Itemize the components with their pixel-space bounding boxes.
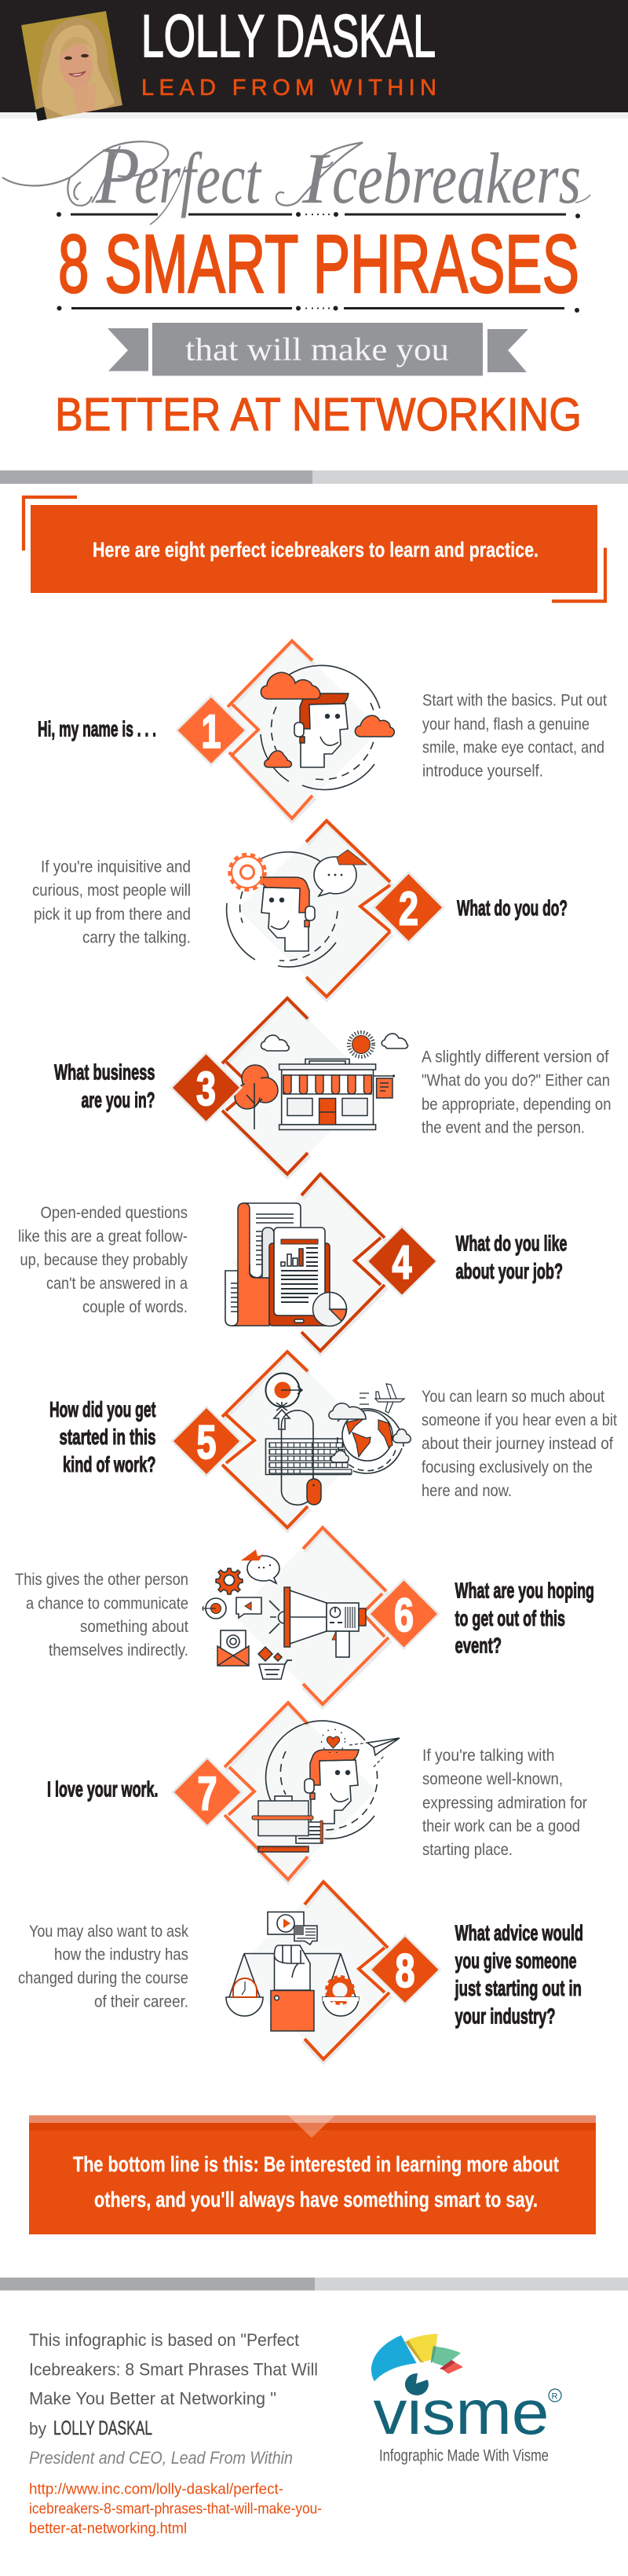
- body 3: the event and the person.: [422, 1118, 585, 1137]
- divider bar: [0, 470, 628, 484]
- title: script line: P: [95, 130, 140, 221]
- ornament rule top: [57, 212, 580, 218]
- diamond frame 6: [234, 1528, 411, 1707]
- tagline: LEAD FROM WITHIN: [141, 75, 436, 101]
- heading 6: event?: [455, 1634, 502, 1657]
- number badge 8: [369, 1934, 441, 2006]
- heading 3: What business: [54, 1060, 155, 1085]
- body 7: If you're talking with: [422, 1747, 554, 1765]
- body 6: This gives the other person: [15, 1571, 188, 1589]
- body 5: focusing exclusively on the: [422, 1458, 593, 1476]
- body 4: can't be answered in a: [46, 1275, 188, 1293]
- source credits: LOLLY DASKAL: [53, 2417, 152, 2439]
- body 5: here and now.: [422, 1482, 512, 1500]
- item 7: [47, 1703, 587, 1883]
- source link: icebreakers-8-smart-phrases-that-will-make-you-: [29, 2501, 322, 2518]
- icon: person with briefcase and paper plane: [252, 1721, 400, 1852]
- heading 4: [455, 1231, 567, 1283]
- body 7: starting place.: [422, 1841, 513, 1859]
- body 2: curious, most people will: [32, 881, 191, 900]
- intro callout: [24, 497, 605, 602]
- diamond frame 8: [235, 1882, 412, 2062]
- source link: better-at-networking.html: [29, 2520, 187, 2537]
- heading 2: What do you do?: [457, 896, 568, 920]
- icon: megaphone with social symbols: [203, 1550, 366, 1679]
- icon: person with clouds: [261, 665, 394, 789]
- body 8: how the industry has: [54, 1946, 188, 1964]
- divider bar: [0, 2278, 628, 2290]
- diamond frame 1: [203, 641, 381, 821]
- icon: keyboard, target and globe: [265, 1373, 411, 1505]
- diamond frame 5: [199, 1352, 376, 1531]
- heading 4: What do you like: [455, 1231, 567, 1255]
- item 1: [38, 641, 607, 821]
- body 8: You may also want to ask: [29, 1923, 188, 1941]
- visme logo: visme: [374, 2377, 550, 2447]
- body 4: Open-ended questions: [41, 1204, 188, 1222]
- source credits: [29, 2330, 318, 2468]
- number badge 4: 4: [392, 1236, 412, 1289]
- heading 1: Hi, my name is . . .: [38, 716, 156, 741]
- intro callout: Here are eight perfect icebreakers to learn and practice.: [93, 538, 539, 562]
- author photo: [21, 11, 122, 126]
- body 4: like this are a great follow-: [18, 1228, 188, 1246]
- diamond frame 4: [232, 1174, 409, 1354]
- body 2: [32, 858, 191, 947]
- heading 5: kind of work?: [63, 1452, 155, 1476]
- body 6: themselves indirectly.: [49, 1641, 188, 1659]
- heading 7: I love your work.: [47, 1776, 159, 1802]
- ribbon banner: [108, 323, 528, 375]
- title: script line: erfect: [134, 138, 262, 218]
- body 1: [422, 691, 607, 781]
- number badge 6: [367, 1578, 440, 1650]
- visme logo: [371, 2334, 561, 2464]
- body 4: couple of words.: [82, 1298, 188, 1316]
- number badge 1: [175, 694, 247, 767]
- item 8: [18, 1882, 583, 2062]
- body 5: [422, 1388, 617, 1500]
- item 5: [49, 1352, 617, 1531]
- ribbon banner: that will make you: [185, 331, 449, 368]
- body 8: of their career.: [94, 1993, 188, 2011]
- heading 6: to get out of this: [455, 1606, 565, 1630]
- title: script line: I: [301, 138, 331, 218]
- heading 6: [455, 1579, 594, 1657]
- ornament rule bottom: [57, 306, 579, 313]
- body 4: up, because they probably: [20, 1251, 188, 1269]
- heading 8: your industry?: [455, 2004, 556, 2029]
- body 1: Start with the basics. Put out: [422, 691, 607, 710]
- diamond frame 3: [199, 998, 376, 1177]
- visme logo: Infographic Made With Visme: [379, 2447, 549, 2464]
- body 8: [18, 1923, 188, 2011]
- icon: scales of justice with hand: [226, 1912, 359, 2031]
- body 3: A slightly different version of: [422, 1048, 609, 1067]
- author name: LOLLY DASKAL: [141, 3, 436, 70]
- body 6: something about: [80, 1618, 188, 1636]
- visme logo: R: [551, 2392, 557, 2402]
- number badge 4: [366, 1225, 438, 1297]
- icon: storefront with tree: [235, 1032, 407, 1129]
- header banner: [0, 0, 628, 119]
- source credits: President and CEO, Lead From Within: [29, 2448, 293, 2468]
- number badge 1: 1: [201, 705, 221, 758]
- heading 3: [54, 1060, 155, 1112]
- number badge 7: 7: [198, 1767, 217, 1820]
- number badge 6: 6: [394, 1589, 414, 1641]
- source credits: by: [29, 2419, 46, 2439]
- body 7: their work can be a good: [422, 1817, 580, 1835]
- source credits: Make You Better at Networking ": [29, 2389, 276, 2408]
- number badge 5: 5: [196, 1416, 217, 1469]
- diamond frame 7: [199, 1703, 377, 1883]
- heading 5: How did you get: [49, 1397, 155, 1422]
- heading 5: [49, 1397, 155, 1476]
- body 1: introduce yourself.: [422, 762, 543, 781]
- item 3: [54, 998, 611, 1177]
- number badge 7: [171, 1756, 243, 1828]
- body 7: expressing admiration for: [422, 1794, 587, 1813]
- body 2: If you're inquisitive and: [41, 858, 191, 876]
- body 3: [422, 1048, 611, 1137]
- body 4: [18, 1204, 188, 1316]
- number badge 2: 2: [399, 883, 418, 935]
- number badge 3: [170, 1052, 243, 1124]
- body 2: carry the talking.: [82, 928, 191, 947]
- item 4: [18, 1174, 567, 1354]
- heading 4: about your job?: [455, 1259, 563, 1283]
- heading 3: are you in?: [82, 1088, 155, 1112]
- item 2: [32, 821, 568, 1000]
- icon: person with gear and speech bubble: [227, 850, 367, 967]
- number badge 8: 8: [396, 1945, 414, 1997]
- heading 8: [455, 1921, 583, 2029]
- diamond frame 2: [238, 821, 415, 1000]
- title: script line: [2, 130, 590, 225]
- number badge 2: [372, 871, 445, 944]
- body 8: changed during the course: [18, 1970, 188, 1988]
- number badge 5: [170, 1406, 243, 1477]
- body 7: [422, 1747, 587, 1859]
- body 2: pick it up from there and: [34, 906, 191, 924]
- icon: documents and tablet: [225, 1203, 347, 1326]
- source credits: This infographic is based on "Perfect: [29, 2330, 299, 2350]
- body 7: someone well-known,: [422, 1770, 563, 1788]
- body 6: a chance to communicate: [26, 1594, 188, 1613]
- body 5: about their journey instead of: [422, 1435, 613, 1453]
- body 1: your hand, flash a genuine: [422, 715, 590, 734]
- heading 5: started in this: [60, 1425, 155, 1449]
- body 6: [15, 1571, 188, 1659]
- source credits: Icebreakers: 8 Smart Phrases That Will: [29, 2359, 318, 2379]
- source link: http://www.inc.com/lolly-daskal/perfect-: [29, 2482, 283, 2498]
- bottom line callout: [29, 2115, 596, 2234]
- item 6: [15, 1528, 594, 1707]
- title: better at networking: BETTER AT NETWORKING: [55, 389, 582, 441]
- source link: [29, 2482, 322, 2537]
- number badge 3: 3: [196, 1063, 216, 1115]
